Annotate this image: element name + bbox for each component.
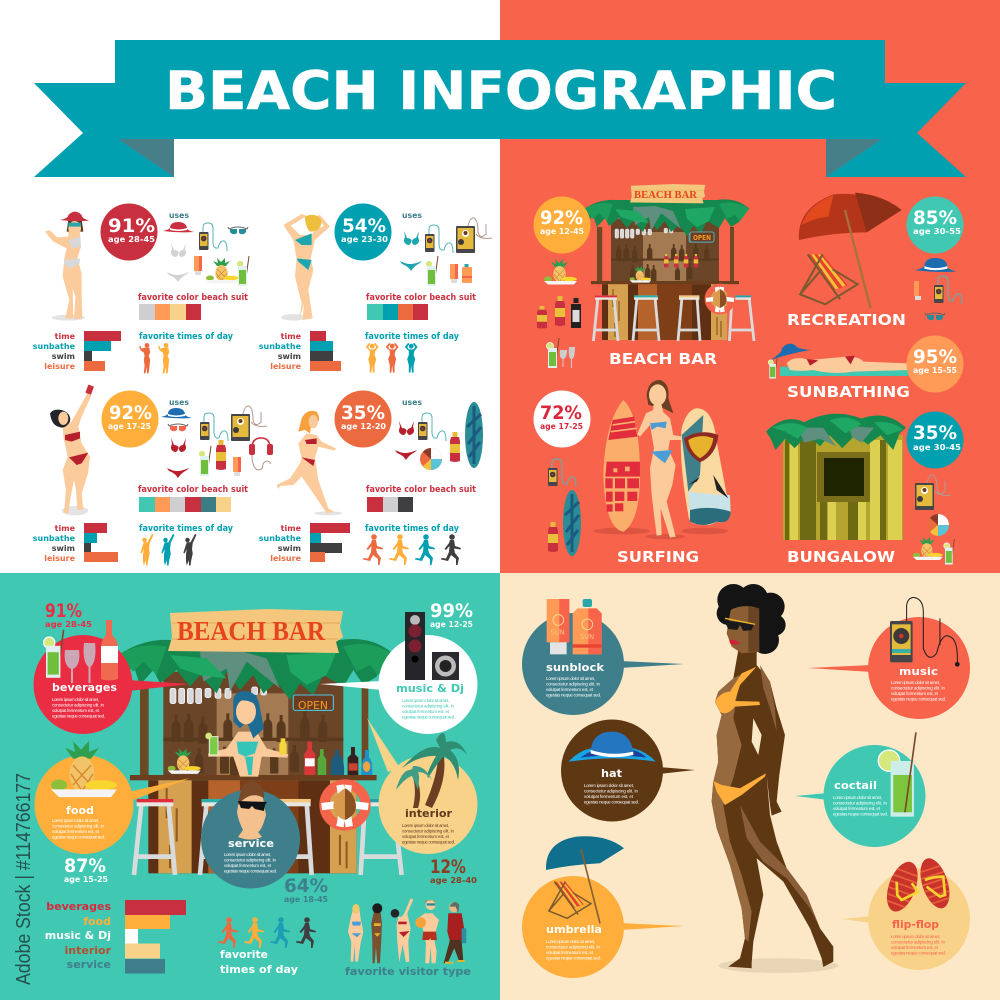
color swatches: favorite color beach suit (366, 293, 476, 320)
lorem text: Lorem ipsum dolor sit amet, (52, 818, 99, 823)
label: SUNBATHING: SUNBATHING (787, 383, 910, 401)
lorem text: volutpat fermentum est, et (546, 950, 594, 955)
bar chart: time, sunbathe, swim, leisure: sunbathe (33, 342, 76, 351)
lorem text: volutpat fermentum est, et (833, 806, 881, 811)
illustration: woman sunbathing on towel (768, 344, 908, 379)
stat circle: 92%: age 17-25 (108, 422, 151, 431)
panel: top-right coral background with beach activities (500, 0, 1000, 573)
lorem text: consectetur adipiscing elit. In (52, 824, 105, 828)
lorem text: egestas neque consequat sed. (52, 834, 105, 840)
bar chart: time, sunbathe, swim, leisure: swim (52, 352, 75, 361)
lorem text: volutpat fermentum est, et (584, 794, 634, 799)
lorem text: egestas neque consequat sed. (891, 950, 946, 956)
lorem text: consectetur adipiscing elit. In (546, 944, 601, 950)
profile: 54% visitor age 23-30 (259, 204, 492, 373)
panel: top-left white background with four beach visitor profiles (0, 0, 500, 573)
stat circle: 92%: 92% (109, 402, 152, 424)
bubble: beverages (34, 620, 190, 734)
figure: woman in red hat and grey bikini (45, 212, 89, 321)
lorem text: volutpat fermentum est, et (546, 687, 594, 692)
lorem text: consectetur adipiscing elit. In (52, 702, 105, 708)
lorem text: volutpat fermentum est, et (52, 708, 100, 713)
lorem text (224, 852, 277, 874)
bar chart (259, 331, 341, 371)
stat circle: 91%: 91% (108, 215, 155, 237)
favorite times of day (363, 524, 461, 565)
sign: BEACH BAR (168, 609, 343, 653)
bubble: umbrella: umbrella (546, 923, 602, 936)
watermark credit: Adobe Stock: Adobe Stock | #114766177 (13, 773, 35, 985)
bar chart: beverages, food, music, interior, service: music & Dj (45, 929, 111, 942)
stat circle: 92% (102, 390, 158, 448)
stat circle: 35%: 35% (341, 402, 385, 424)
stat circle: 35% age 30-45: 35% (913, 422, 957, 444)
lorem text (402, 823, 455, 844)
uses icons (395, 398, 483, 470)
lorem text: volutpat fermentum est, et (402, 709, 450, 714)
sign: open: OPEN (693, 234, 711, 242)
lorem text (402, 698, 455, 720)
stat: 87% age 15-25: 87% (64, 855, 106, 877)
icon: blue hat (568, 732, 656, 762)
bar chart: beverages, food, music, interior, service: food (83, 915, 111, 928)
lorem text: egestas neque consequat sed. (402, 840, 455, 844)
stat circle: 92% age 12-45: age 12-45 (540, 227, 584, 236)
bar chart: beverages, food, music, interior, service: interior (64, 944, 112, 957)
lorem text: volutpat fermentum est, et (52, 829, 100, 834)
stat: 64% age 18-45: 64% (284, 875, 328, 897)
lorem text (546, 676, 601, 698)
color swatches: favorite color beach suit: favorite color beach suit (366, 293, 476, 303)
stat circle: 54%: 54% (342, 215, 386, 237)
stat circle: 85% age 30-55 (906, 196, 964, 254)
lorem text: Lorem ipsum dolor sit amet, (224, 852, 271, 857)
bubble: hat: hat (601, 767, 622, 780)
bar chart: time, sunbathe, swim, leisure (33, 331, 121, 371)
stat circle: 35%: age 12-20 (341, 422, 386, 431)
lorem text: Lorem ipsum dolor sit amet, (402, 823, 449, 828)
color swatches: favorite color beach suit (138, 485, 248, 512)
lorem text (52, 818, 105, 840)
illustration: umbrella and deck chair (799, 193, 902, 308)
stat circle: 72% age 17-25 (534, 390, 590, 448)
stat: 99% age 12-25: age 12-25 (430, 620, 473, 629)
lorem text: consectetur adipiscing elit. In (584, 788, 639, 794)
stat: 99% age 12-25: 99% (430, 600, 473, 622)
bubble: music (808, 598, 970, 719)
bubble: flip-flop (842, 855, 970, 970)
uses icons: uses (402, 398, 423, 407)
bar chart: sunbathe (259, 342, 302, 351)
lorem text: Lorem ipsum dolor sit amet, (402, 698, 449, 703)
icons: phone, surfboard, bottle (548, 459, 581, 556)
bubble: coctail: coctail (834, 779, 877, 792)
stat circle: 35% (334, 390, 392, 448)
icon: teal umbrella with deck chair (546, 836, 624, 923)
stat circle: 91% (100, 204, 158, 260)
lorem text: egestas neque consequat sed. (402, 714, 455, 720)
favorite visitor type figures (345, 898, 471, 978)
title: BEACH INFOGRAPHIC (165, 61, 837, 122)
bubble: sunblock (522, 599, 684, 715)
label: BUNGALOW: BUNGALOW (787, 548, 895, 566)
bar chart: leisure (270, 362, 302, 371)
illustration: surfer girl with two boards (593, 380, 731, 539)
illustration: beach bar hut (584, 184, 754, 341)
bar chart: sunbathe (33, 534, 76, 543)
lorem text (833, 795, 888, 816)
label: RECREATION: RECREATION (787, 311, 906, 329)
illustration: large beach bar (118, 639, 402, 875)
lorem text (52, 697, 105, 718)
figure: orange-haired woman running (277, 411, 342, 515)
bubble: food: food (66, 804, 94, 817)
favorite times of day (139, 332, 233, 373)
panel: bottom-right cream beach essentials (500, 573, 1000, 1000)
lorem text: consectetur adipiscing elit. In (546, 682, 601, 686)
bar chart: beverages, food, music, interior, service: service (67, 958, 111, 971)
lorem text: egestas neque consequat sed. (546, 956, 601, 960)
bubble: beverages: beverages (52, 681, 117, 694)
sign: beach bar (630, 184, 705, 203)
sign: open (690, 232, 714, 242)
bar chart: time (55, 524, 76, 533)
favorite times of day (365, 332, 459, 373)
uses icons (163, 211, 249, 286)
bubble: music and Dj: music & Dj (396, 682, 464, 695)
stat circle: 91%: age 28-45 (108, 235, 155, 244)
lorem text: consectetur adipiscing elit. In (402, 828, 455, 834)
lorem text: volutpat fermentum est, et (891, 945, 939, 950)
icon: cocktail glass (878, 732, 916, 817)
color swatches: favorite color beach suit: favorite color beach suit (138, 485, 248, 495)
bar chart (33, 523, 118, 563)
panel: bottom-left teal beach bar details (0, 573, 500, 1000)
bubble: interior (367, 718, 478, 854)
lorem text: volutpat fermentum est, et (224, 863, 272, 868)
stat circle: 72% age 17-25: age 17-25 (540, 422, 583, 431)
uses icons: uses (402, 211, 423, 220)
figure: woman in orange bikini and sunglasses (712, 584, 838, 973)
uses icons: uses (169, 398, 190, 407)
icon: phone with earphones (890, 598, 960, 667)
bubble: service (201, 781, 300, 888)
lorem text: Lorem ipsum dolor sit amet, (584, 783, 634, 788)
color swatches: favorite color beach suit: favorite color beach suit (138, 293, 248, 303)
icons: speakers (405, 612, 459, 680)
icons: sun cream tube and bottle: SUN (551, 628, 565, 636)
color swatches: favorite color beach suit (366, 485, 476, 512)
lorem text: egestas neque consequat sed. (224, 868, 277, 874)
lorem text (891, 934, 946, 956)
favorite times of day (218, 917, 316, 976)
stat circle: 54% (334, 204, 392, 260)
bar chart (259, 523, 350, 563)
lorem text: Lorem ipsum dolor sit amet, (891, 934, 940, 939)
sign: OPEN: OPEN (298, 699, 328, 712)
lorem text: egestas neque consequat sed. (891, 696, 946, 702)
bubble: service: service (228, 837, 274, 850)
stat: 12% age 28-40: age 28-40 (430, 876, 477, 885)
icon: waiter head with sunglasses (237, 781, 267, 840)
color swatches: favorite color beach suit (138, 293, 248, 320)
stat circle: 85% age 30-55: age 30-55 (913, 227, 961, 236)
icons: food, bottles, drinks (537, 259, 581, 368)
icon: food plate (51, 741, 117, 797)
bubble: umbrella (522, 836, 684, 978)
stat circle: 35% age 30-45: age 30-45 (913, 443, 961, 452)
label: SURFING: SURFING (617, 548, 699, 566)
bubble: music and Dj (320, 612, 478, 734)
bubble: interior: interior (405, 807, 453, 820)
lorem text: consectetur adipiscing elit. In (224, 858, 277, 862)
figure: bartender (205, 691, 288, 777)
bubble: coctail (795, 732, 926, 847)
icons: cocktail, wine glasses, bottle (44, 620, 118, 683)
bar chart: time (281, 332, 302, 341)
figure: blonde woman with teal bikini (281, 214, 330, 321)
stat: 91% age 28-45: age 28-45 (45, 620, 92, 629)
lorem text: consectetur adipiscing elit. In (402, 704, 455, 708)
bar chart: beverages, food, music, interior, service: beverages (46, 900, 111, 913)
lorem text: volutpat fermentum est, et (891, 691, 939, 696)
favorite times of day: times of day (220, 963, 298, 976)
profile: 35% visitor age 12-20 (259, 390, 483, 565)
stat circle: 85% age 30-55: 85% (913, 207, 957, 229)
icons: sun cream tube and bottle: SUN (580, 633, 594, 641)
favorite times of day: favorite times of day (365, 332, 459, 342)
banner: title ribbon (34, 40, 966, 177)
profile: 92% visitor age 17-25 (33, 385, 273, 566)
bar chart: leisure (270, 554, 302, 563)
bar chart: time, sunbathe, swim, leisure: time (55, 332, 76, 341)
stat circle: 35% age 30-45 (906, 412, 964, 468)
lorem text: Lorem ipsum dolor sit amet, (546, 676, 595, 681)
stat circle: 54%: age 23-30 (341, 235, 388, 244)
favorite times of day (139, 524, 233, 566)
bubble: food (34, 741, 190, 854)
sign: BEACH BAR: BEACH BAR (177, 616, 325, 646)
bar chart: sunbathe (259, 534, 302, 543)
icons: hat, tube, phone, glasses (914, 258, 962, 320)
counter bottles (304, 742, 372, 775)
lorem text: Lorem ipsum dolor sit amet, (52, 697, 99, 702)
lorem text: Lorem ipsum dolor sit amet, (833, 795, 882, 800)
stat circle: 95% age 15-55: 95% (913, 346, 957, 368)
lorem text (891, 680, 946, 702)
lorem text (546, 939, 601, 960)
lorem text: consectetur adipiscing elit. In (833, 800, 888, 806)
icon: flip-flops (881, 855, 955, 916)
bar chart: swim (278, 544, 301, 553)
lorem text: volutpat fermentum est, et (402, 834, 450, 839)
icons: sun cream tube and bottle (547, 599, 602, 654)
lorem text: Lorem ipsum dolor sit amet, (891, 680, 940, 685)
illustration: bamboo bungalow (766, 414, 906, 540)
bar chart: swim (278, 352, 301, 361)
lorem text: egestas neque consequat sed. (584, 800, 639, 804)
icon: palm trees (396, 733, 467, 808)
stat circle: 95% age 15-55 (906, 336, 964, 392)
lorem text: egestas neque consequat sed. (833, 812, 888, 816)
bar chart: beverages, food, music, interior, service (45, 900, 186, 974)
stat: 87% age 15-25: age 15-25 (64, 875, 108, 884)
uses icons (161, 398, 273, 478)
bubble: music: music (899, 665, 938, 678)
uses icons (400, 211, 492, 286)
bubble: flip-flop: flip-flop (892, 918, 939, 931)
lorem text: consectetur adipiscing elit. In (891, 940, 946, 944)
stat circle: 92% age 12-45 (534, 196, 590, 254)
label: BEACH BAR: BEACH BAR (609, 350, 717, 368)
lorem text: egestas neque consequat sed. (546, 692, 601, 698)
figure: dark-haired woman taking a selfie (50, 385, 94, 515)
icons: tablet, ball, food, cocktail (913, 475, 954, 565)
favorite times of day: favorite times of day (365, 524, 459, 534)
bar chart: time (281, 524, 302, 533)
bubble: hat (561, 720, 695, 822)
stat circle: 72% age 17-25: 72% (540, 402, 582, 424)
lorem text (584, 783, 639, 804)
stat: 64% age 18-45: age 18-45 (284, 895, 328, 904)
bubble: sunblock: sunblock (546, 661, 605, 674)
favorite times of day: favorite (220, 948, 268, 961)
lorem text: consectetur adipiscing elit. In (891, 686, 946, 690)
lorem text: Lorem ipsum dolor sit amet, (546, 939, 595, 944)
stat circle: 92% age 12-45: 92% (540, 207, 583, 229)
uses icons: uses (169, 211, 190, 220)
favorite times of day: favorite times of day (139, 524, 233, 534)
favorite visitor type figures: favorite visitor type (345, 966, 471, 978)
stat: 12% age 28-40: 12% (430, 856, 466, 878)
favorite times of day: favorite times of day (139, 332, 233, 342)
profile: 91% visitor age 28-45 (33, 204, 249, 373)
lorem text: egestas neque consequat sed. (52, 714, 105, 718)
color swatches: favorite color beach suit: favorite color beach suit (366, 485, 476, 495)
stat: 91% age 28-45: 91% (45, 600, 82, 622)
bar chart: swim (52, 544, 75, 553)
bar chart: leisure (44, 554, 76, 563)
bar chart: time, sunbathe, swim, leisure: leisure (44, 362, 76, 371)
stat circle: 95% age 15-55: age 15-55 (913, 366, 957, 375)
sign: beach bar: BEACH BAR (634, 190, 698, 201)
